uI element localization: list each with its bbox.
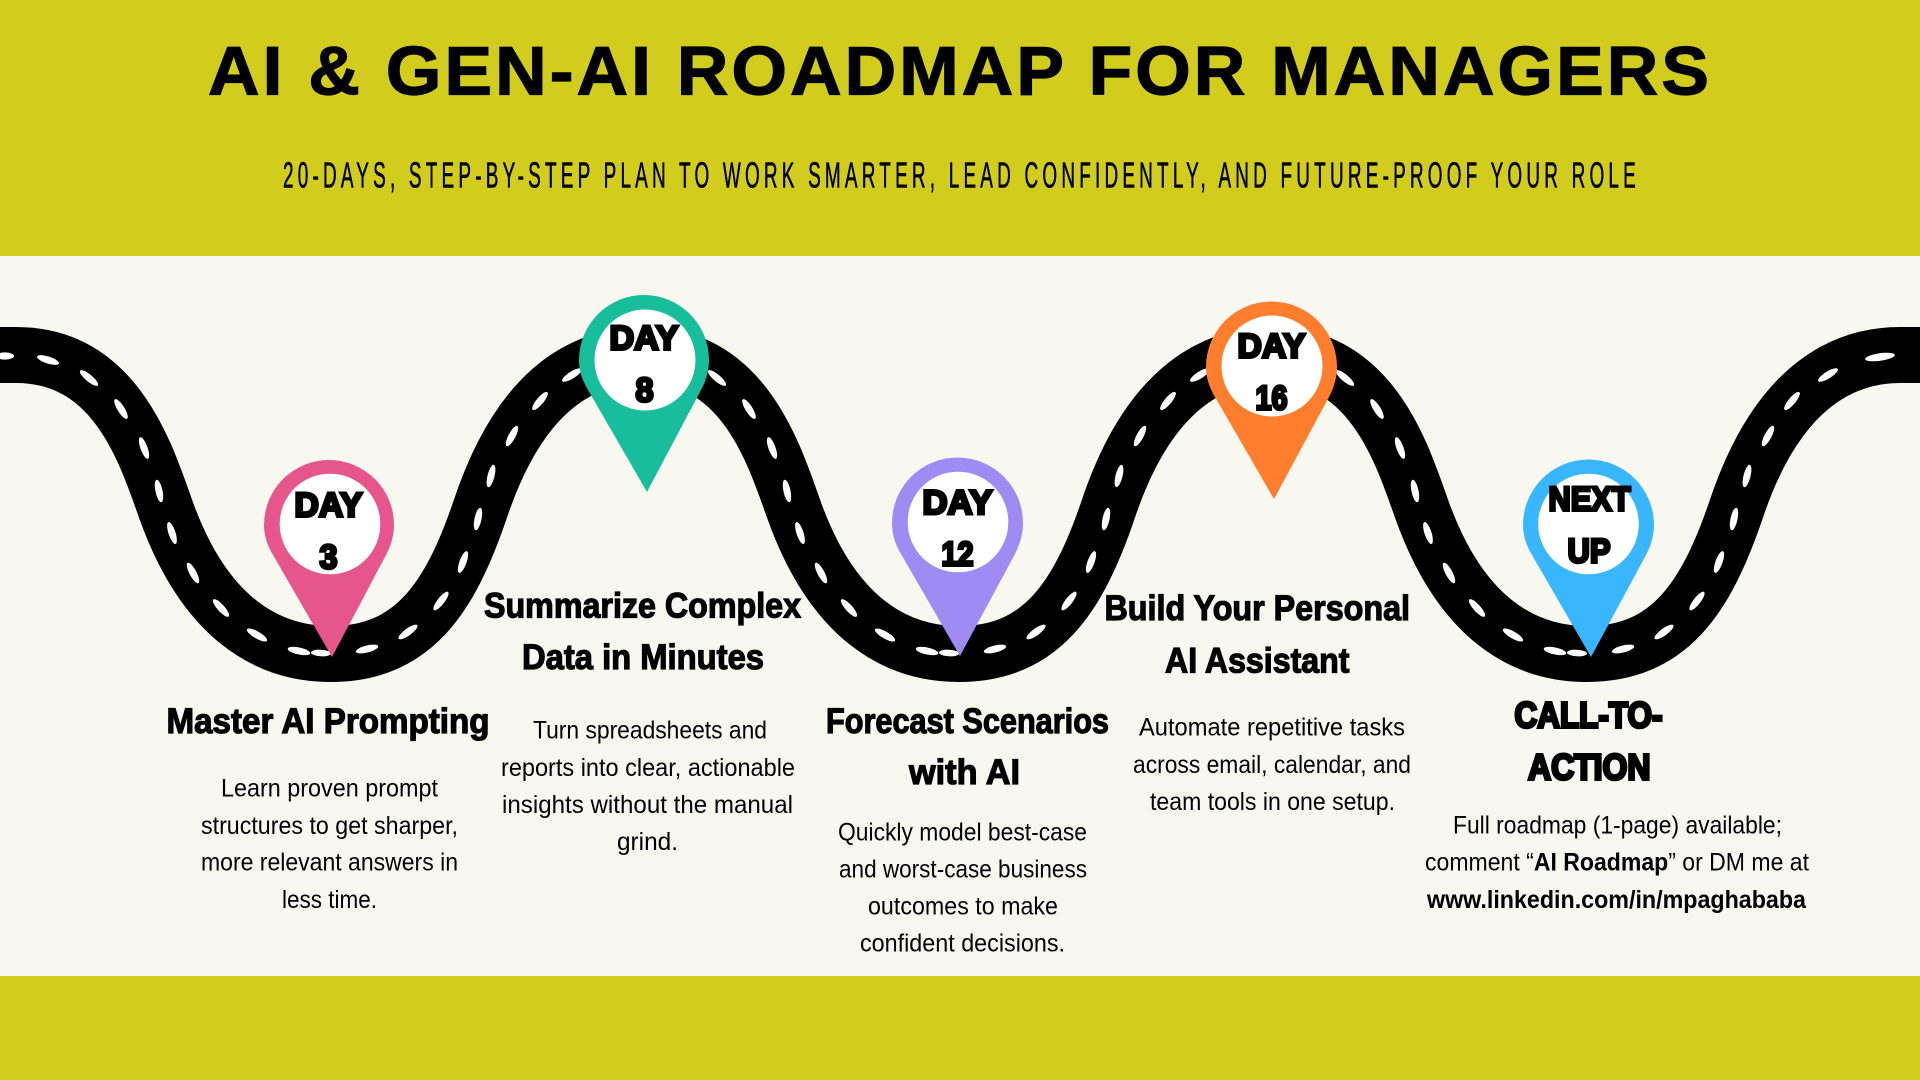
pin: day 12 <box>892 458 1023 656</box>
pin: day 16: DAY <box>1238 328 1306 366</box>
description: comment “AI Roadmap” or DM me at <box>1425 849 1809 877</box>
description <box>201 774 458 914</box>
panel: step summarize complex data <box>484 586 801 856</box>
description <box>1425 812 1809 914</box>
heading <box>1514 694 1662 788</box>
winding road <box>0 351 1920 657</box>
description: Turn spreadsheets and <box>533 717 767 745</box>
heading: Summarize Complex <box>484 586 801 626</box>
description: Quickly model best-case <box>838 819 1087 847</box>
description: www.linkedin.com/in/mpaghababa <box>1426 886 1807 914</box>
panel: step master ai prompting <box>166 702 490 914</box>
panel: step forecast scenarios <box>826 702 1109 958</box>
panel: call to action <box>1425 694 1809 914</box>
description: confident decisions. <box>860 930 1065 958</box>
pin: day 3: 3 <box>320 538 338 576</box>
pin: next up: NEXT <box>1548 480 1631 518</box>
pin: day 8 <box>579 295 709 492</box>
pin: next up <box>1523 460 1654 657</box>
title: AI & GEN-AI ROADMAP FOR MANAGERS <box>208 32 1712 110</box>
heading <box>1104 589 1410 681</box>
heading: CALL-TO- <box>1514 694 1662 736</box>
description <box>838 819 1087 958</box>
pin: day 12: 12 <box>942 536 974 574</box>
description: and worst-case business <box>839 856 1087 884</box>
panel: header band <box>0 0 1920 256</box>
pin: day 16 <box>1206 302 1337 499</box>
description: more relevant answers in <box>201 849 458 877</box>
heading: Forecast Scenarios <box>826 702 1109 741</box>
description <box>1133 714 1411 816</box>
heading: with AI <box>908 753 1020 792</box>
description: reports into clear, actionable <box>501 754 795 782</box>
heading: Master AI Prompting <box>166 702 490 741</box>
description: across email, calendar, and <box>1133 751 1411 779</box>
description: less time. <box>282 886 377 914</box>
description: team tools in one setup. <box>1150 788 1395 816</box>
heading <box>826 702 1109 792</box>
description: insights without the manual <box>502 791 793 819</box>
panel: step build personal assistant <box>1104 589 1411 816</box>
pin: day 8: DAY <box>610 320 679 358</box>
pin: day 12: DAY <box>922 484 993 522</box>
description: outcomes to make <box>868 893 1058 921</box>
pin: day 3 <box>264 460 394 657</box>
heading: Data in Minutes <box>522 638 764 677</box>
pin: day 3: DAY <box>294 486 363 524</box>
heading: Build Your Personal <box>1104 589 1410 628</box>
heading: AI Assistant <box>1165 642 1350 681</box>
heading <box>484 586 801 677</box>
pin: day 16: 16 <box>1256 380 1288 418</box>
description: Full roadmap (1-page) available; <box>1453 812 1782 840</box>
description <box>501 717 795 856</box>
description: structures to get sharper, <box>201 812 458 840</box>
panel: footer band <box>0 976 1920 1080</box>
heading: ACTION <box>1528 746 1650 788</box>
pin: next up: UP <box>1568 532 1610 570</box>
description: Learn proven prompt <box>221 774 438 802</box>
panel: content background <box>0 256 1920 976</box>
pin: day 8: 8 <box>636 372 654 410</box>
description: grind. <box>617 828 678 856</box>
description: Automate repetitive tasks <box>1139 714 1405 742</box>
